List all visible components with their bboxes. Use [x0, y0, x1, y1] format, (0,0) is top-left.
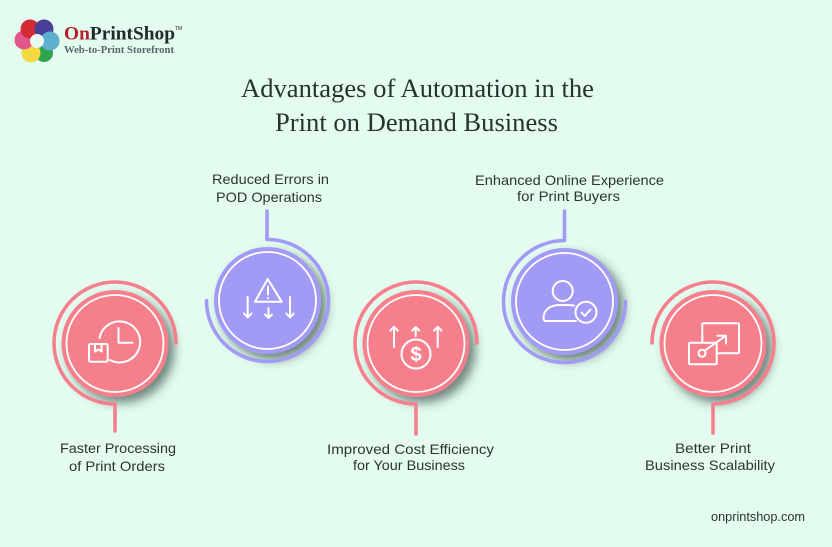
panel: cost efficiency [327, 282, 494, 473]
panel: faster processing [54, 282, 176, 474]
icon: dollar sign: $ [410, 344, 422, 366]
label: Reduced Errors in [212, 171, 329, 187]
logo: OnPrintShop [14, 20, 182, 62]
label: Enhanced Online Experience [475, 172, 664, 188]
trademark mark: TM [175, 26, 182, 32]
badge circle [214, 247, 321, 354]
label: Faster Processing [60, 440, 176, 456]
panel: online experience [475, 172, 664, 362]
website url: onprintshop.com [711, 509, 805, 524]
icon: scaling rectangles [689, 323, 739, 364]
title [241, 74, 594, 137]
label: for Your Business [353, 457, 465, 473]
icon: dollar and up arrows [390, 327, 441, 368]
label [212, 171, 329, 205]
panel: scalability [645, 282, 775, 473]
icon: clock and parcel [89, 321, 140, 362]
arc connector [54, 282, 176, 431]
label: for Print Buyers [517, 188, 620, 204]
arc connector [355, 282, 477, 434]
title: Print on Demand Business [275, 108, 558, 137]
label [60, 440, 176, 474]
label [327, 441, 494, 473]
arc connector [503, 211, 626, 362]
panel: reduced errors [206, 171, 329, 361]
label: Business Scalability [645, 457, 775, 473]
arc connector [652, 282, 774, 433]
title: Advantages of Automation in the [241, 74, 594, 103]
badge circle [62, 290, 168, 397]
arc connector [206, 211, 328, 361]
badge circle [660, 290, 766, 397]
icon: colour flower [14, 20, 60, 62]
label [475, 172, 664, 204]
label [645, 440, 775, 473]
icon: warning and down arrows [244, 279, 294, 318]
label: POD Operations [216, 189, 322, 205]
logo tagline: Web-to-Print Storefront [64, 45, 175, 56]
badge circle [511, 248, 618, 355]
badge circle [362, 290, 470, 397]
label: Better Print [675, 440, 751, 456]
label: of Print Orders [69, 458, 165, 474]
logo wordmark: OnPrintShop [64, 24, 175, 44]
label: Improved Cost Efficiency [327, 441, 494, 457]
icon: verified user [544, 281, 596, 323]
